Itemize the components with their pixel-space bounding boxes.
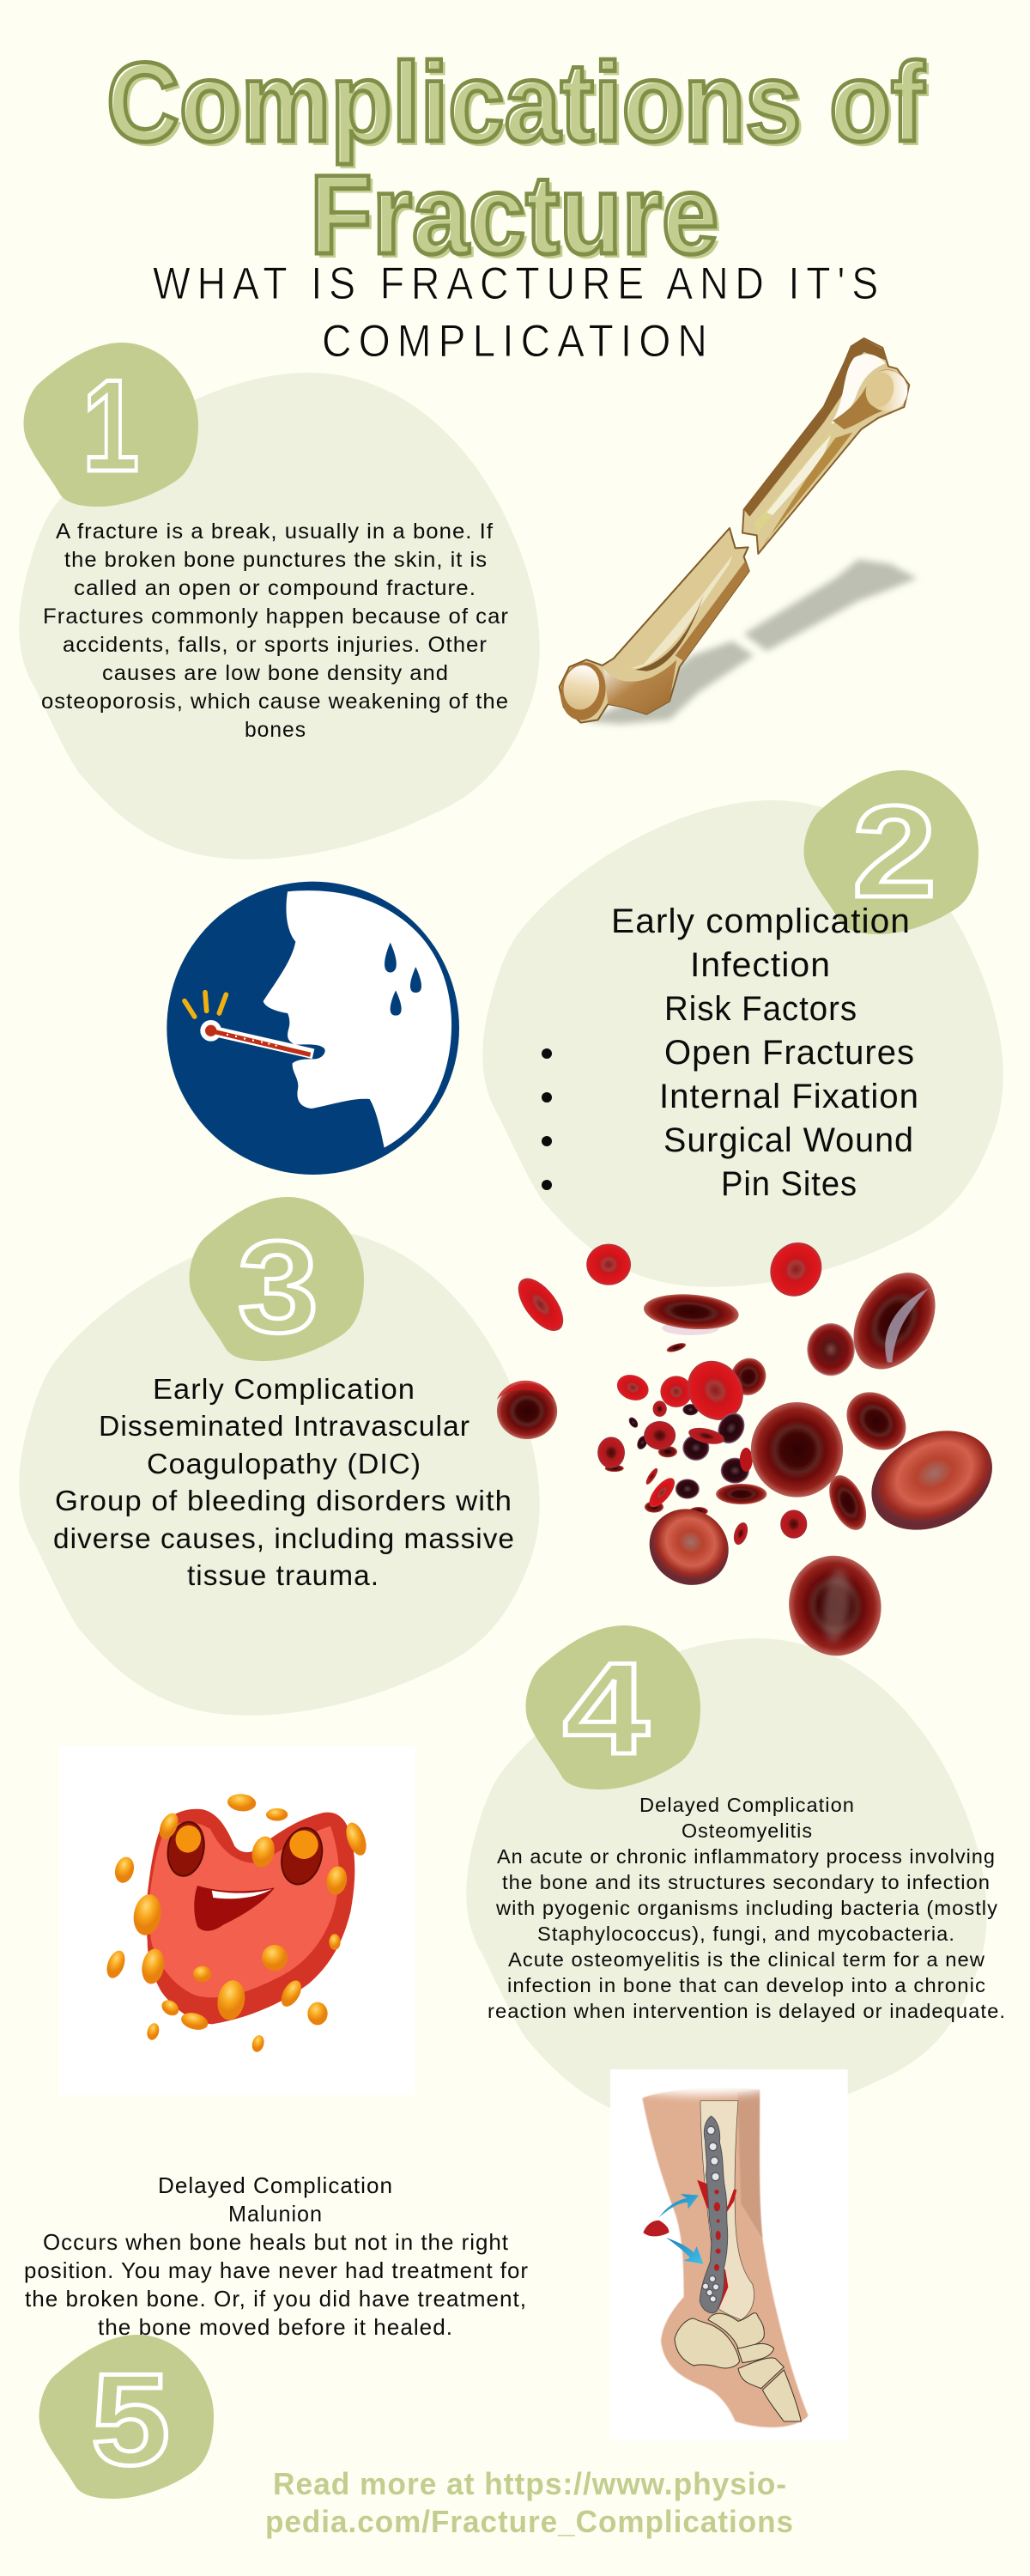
footer source link: Read more at https://www.physio-	[273, 2466, 787, 2501]
text block 5: malunion: Malunion	[228, 2201, 323, 2227]
metal plate	[700, 2116, 728, 2313]
arrows	[658, 2194, 703, 2264]
text block 3: DIC	[53, 1373, 515, 1591]
cell body	[146, 1809, 354, 2024]
number badge 5	[39, 2335, 214, 2499]
subtitle: COMPLICATION	[322, 316, 714, 367]
number badge 3: 3	[238, 1214, 318, 1360]
text block 5: malunion: position. You may have never had treatment for	[24, 2257, 529, 2283]
text block 2: infection: Pin Sites	[721, 1165, 857, 1203]
text block 4: osteomyelitis: Delayed Complication	[639, 1794, 855, 1816]
icon: fever face with thermometer	[167, 882, 459, 1175]
number badge 5: 5	[91, 2347, 170, 2493]
text block 5: malunion: the broken bone. Or, if you did have treatment,	[25, 2286, 527, 2312]
text block 4: osteomyelitis: Osteomyelitis	[682, 1820, 813, 1842]
panel blob 4	[466, 1638, 987, 2125]
text block 2: infection: Infection	[690, 946, 831, 984]
title shadow fill: Fracture	[313, 155, 722, 281]
text block 4: osteomyelitis: with pyogenic organisms including bacteria (mostly	[495, 1897, 998, 1919]
text block 4: osteomyelitis: the bone and its structures secondary to infection	[502, 1871, 991, 1893]
illustration: ankle with plate and bone graft	[610, 2069, 848, 2441]
number badge 1	[24, 343, 198, 507]
text block 3: DIC: tissue trauma.	[187, 1559, 379, 1591]
bone shadow	[584, 560, 917, 724]
text block 4: osteomyelitis	[488, 1794, 1006, 2022]
title outline: Complications of	[106, 39, 924, 165]
text block 3: DIC: Group of bleeding disorders with	[55, 1485, 512, 1516]
text block 2: infection	[542, 902, 919, 1203]
number badge 2	[804, 770, 978, 934]
text block 1: what is a fracture: causes are low bone density and	[102, 661, 449, 685]
tibia	[700, 2101, 754, 2320]
text block 4: osteomyelitis: reaction when intervention is delayed or inadequate.	[488, 2000, 1006, 2022]
text block 1: what is a fracture: the broken bone punctures the skin, it is	[64, 548, 488, 572]
text block 2: infection: Risk Factors	[664, 990, 857, 1028]
title	[106, 39, 928, 281]
upper bone shard	[742, 338, 909, 554]
text block 3: DIC: Early Complication	[153, 1373, 415, 1405]
number badge 3	[190, 1197, 364, 1361]
number badge 1: 1	[82, 353, 139, 499]
graft chips	[643, 2221, 669, 2236]
title shadow fill	[110, 42, 928, 281]
text block 3: DIC: diverse causes, including massive	[53, 1522, 515, 1554]
panel blob 2	[482, 800, 1003, 1287]
skin fade top	[627, 2075, 775, 2095]
text block 5: malunion: Delayed Complication	[158, 2172, 393, 2198]
title shadow fill: Complications of	[110, 42, 928, 168]
number badge 2: 2	[852, 779, 936, 925]
text block 1: what is a fracture	[41, 519, 509, 742]
text block 5: malunion: Occurs when bone heals but not in the right	[43, 2229, 509, 2255]
eyes	[164, 1820, 328, 1889]
panel blob 3	[19, 1229, 540, 1716]
bone graft red at fracture	[700, 2183, 736, 2307]
text block 5: malunion	[24, 2172, 529, 2340]
text block 1: what is a fracture: A fracture is a break, usually in a bone. If	[56, 519, 494, 544]
text block 2: infection: Surgical Wound	[663, 1121, 914, 1159]
subtitle: WHAT IS FRACTURE AND IT'S	[153, 258, 885, 309]
text block 1: what is a fracture: bones	[245, 718, 306, 742]
broken bone illustration	[556, 338, 917, 724]
red blood cells illustration	[497, 1237, 1014, 1659]
fat droplets	[104, 1793, 370, 2053]
leg skin	[642, 2087, 809, 2427]
text block 4: osteomyelitis: infection in bone that can develop into a chronic	[507, 1974, 986, 1996]
footer source link	[265, 2466, 794, 2539]
text block 4: osteomyelitis: Staphylococcus), fungi, and mycobacteria.	[537, 1923, 955, 1945]
title outline: Fracture	[310, 151, 718, 277]
foot bones	[675, 2313, 801, 2421]
text block 2: infection: Internal Fixation	[659, 1078, 919, 1115]
illustration: bone infection cell character	[59, 1747, 415, 2095]
text block 2: infection: Early complication	[611, 902, 911, 940]
text block 5: malunion: the bone moved before it healed.	[98, 2314, 453, 2340]
text block 1: what is a fracture: called an open or compound fracture.	[74, 576, 476, 600]
panel blob 1	[19, 373, 540, 860]
thermometer	[200, 1020, 313, 1054]
subtitle	[153, 258, 885, 367]
number badge 4: 4	[563, 1636, 649, 1782]
text block 3: DIC: Disseminated Intravascular	[99, 1410, 470, 1442]
text block 4: osteomyelitis: An acute or chronic inflammatory process involving	[497, 1845, 996, 1868]
text block 1: what is a fracture: osteoporosis, which cause weakening of the	[41, 690, 509, 714]
text block 1: what is a fracture: Fractures commonly happen because of car	[43, 605, 509, 629]
footer source link: pedia.com/Fracture_Complications	[265, 2504, 794, 2539]
title outline	[106, 39, 924, 277]
mouth	[194, 1886, 275, 1931]
text block 4: osteomyelitis: Acute osteomyelitis is the clinical term for a new	[508, 1948, 985, 1971]
text block 3: DIC: Coagulopathy (DIC)	[147, 1448, 421, 1479]
lower bone shard	[556, 528, 749, 724]
number badge 4	[526, 1625, 700, 1789]
text block 2: infection: Open Fractures	[664, 1034, 915, 1072]
text block 1: what is a fracture: accidents, falls, or sports injuries. Other	[63, 633, 488, 657]
